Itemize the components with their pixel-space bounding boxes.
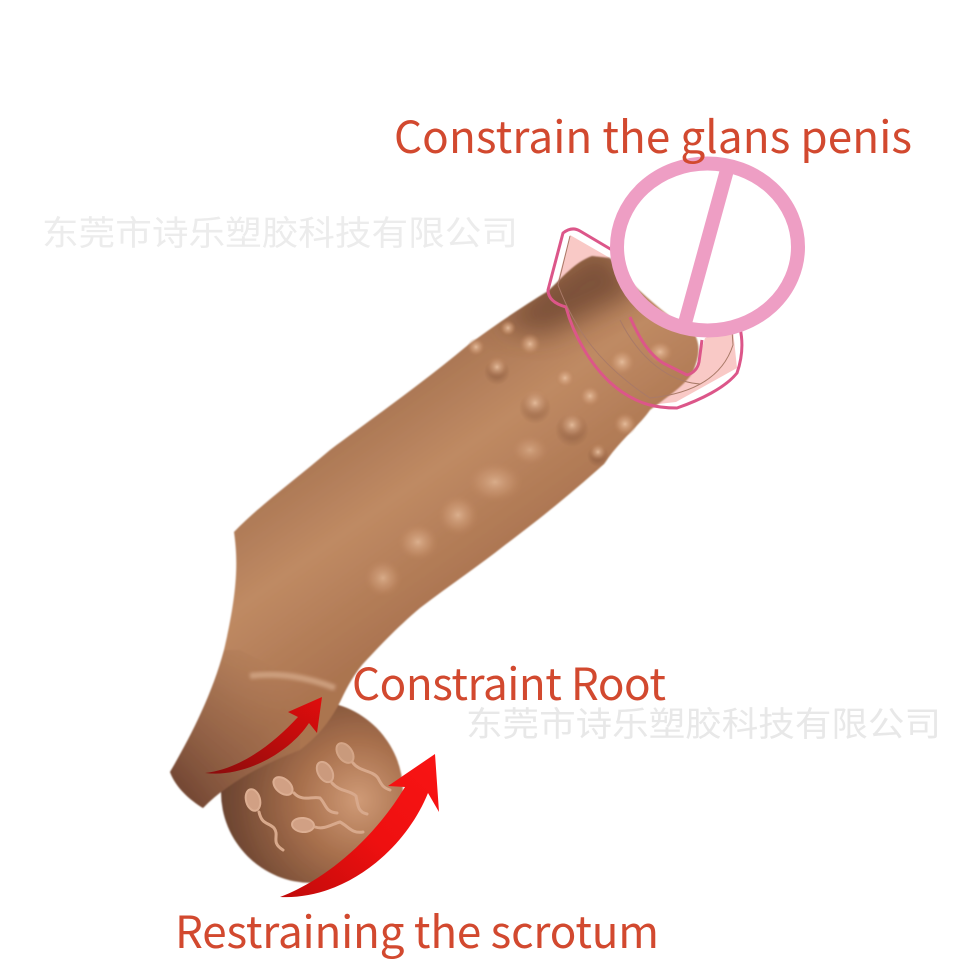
watermark: upper: 东莞市诗乐塑胶科技有限公司 — [42, 215, 518, 253]
arrow: scrotum — [280, 754, 439, 897]
heading: constrain the glans penis: Constrain the glans penis — [394, 102, 912, 166]
pale pink cap behind the tip — [556, 235, 737, 405]
shading at base — [170, 650, 300, 808]
faint inner contour — [558, 236, 733, 398]
surface bumps — [363, 320, 674, 598]
heading: restraining the scrotum: Restraining the scrotum — [175, 897, 659, 961]
icon: sperm group — [243, 740, 390, 850]
pink outline around the tip — [548, 229, 742, 408]
watermark: lower: 东莞市诗乐塑胶科技有限公司 — [466, 706, 941, 744]
sleeve shaft — [170, 256, 699, 808]
infographic canvas — [44, 118, 937, 959]
prohibition-style ring at the glans — [617, 164, 798, 330]
scrotum section — [221, 701, 403, 883]
arrow: root — [205, 697, 322, 774]
crease at root — [250, 675, 335, 688]
product: sleeve body — [170, 245, 699, 883]
shading at tip — [500, 245, 640, 335]
heading: constraint root: Constraint Root — [352, 649, 666, 713]
